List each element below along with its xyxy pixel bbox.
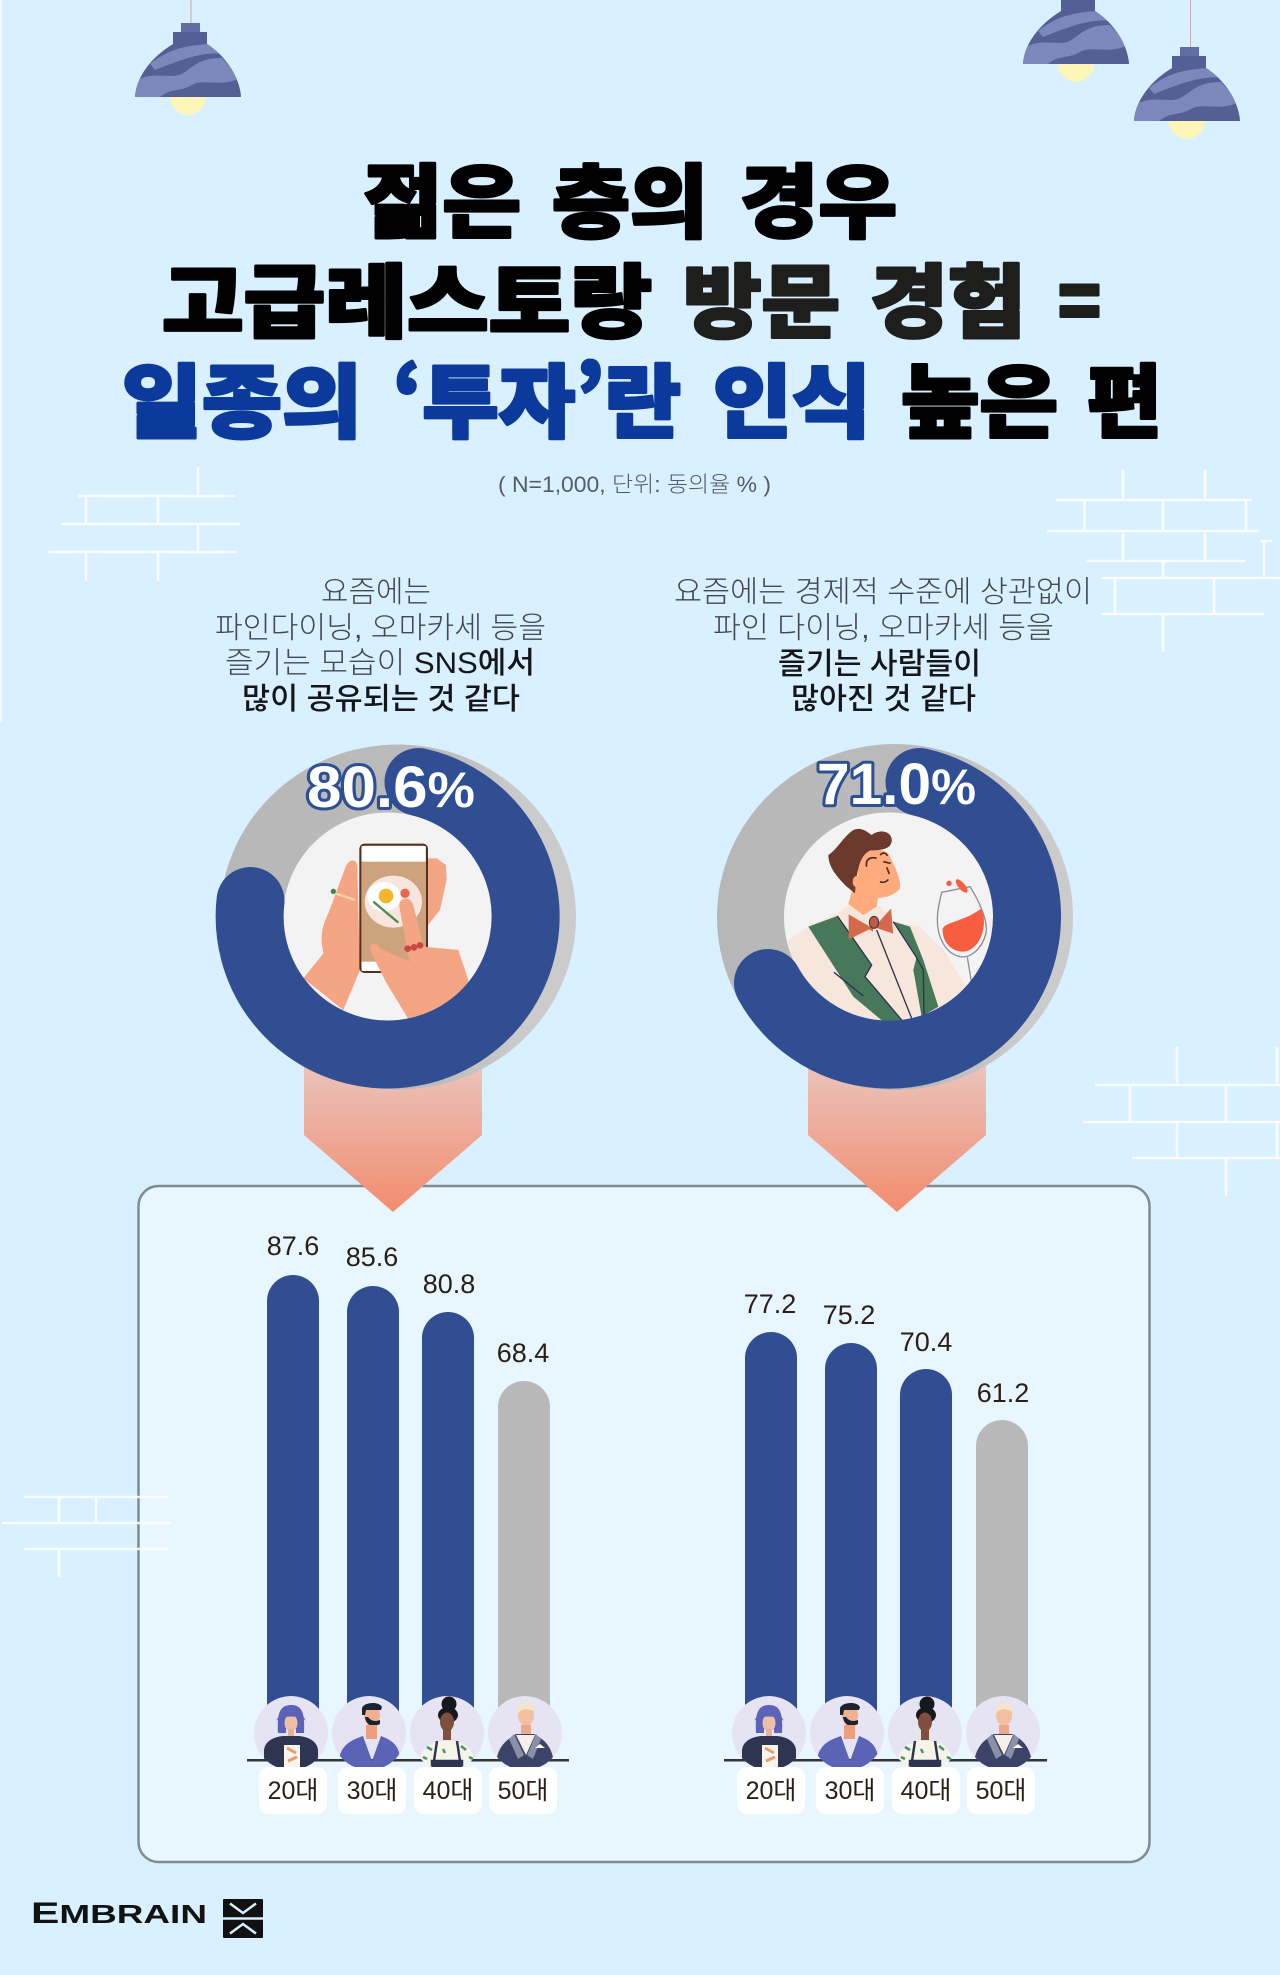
avatar: 40s xyxy=(410,1696,484,1770)
donut chart: 71.0%: 71.0% xyxy=(817,752,976,817)
title: 방문 xyxy=(683,239,840,355)
age labels and avatars: right: 50대 xyxy=(976,1777,1026,1805)
logo: Embrain wordmark: E MBRAIN xyxy=(31,1897,207,1930)
title: = xyxy=(1058,239,1101,355)
avatar: 50s xyxy=(488,1696,562,1770)
text block: left question: 요즘에는 xyxy=(321,576,431,609)
title xyxy=(122,139,1162,455)
bar chart: right age groups: 77.2 xyxy=(744,1289,796,1319)
text block: left question: 많이 공유되는 것 같다 xyxy=(242,683,520,716)
text block: right question: 요즘에는 경제적 수준에 상관없이 xyxy=(674,576,1092,609)
avatar: 20s right xyxy=(732,1696,806,1770)
age labels and avatars: right: 40대 xyxy=(901,1777,951,1805)
lamp: right upper xyxy=(1018,0,1129,82)
bar chart: right age groups xyxy=(744,1289,1029,1740)
bar chart: right age groups: 75.2 xyxy=(823,1300,875,1330)
donut chart: 80.6%: 80.6% xyxy=(307,755,475,820)
text block: right question: 파인 다이닝, 오마카세 등을 xyxy=(713,612,1054,645)
text block: left question: 파인다이닝, 오마카세 등을 xyxy=(215,612,546,645)
title: 젊은 xyxy=(364,139,521,255)
bar chart: left age groups: 68.4 xyxy=(497,1338,549,1368)
title: 경우 xyxy=(740,139,897,255)
age labels and avatars: left: 30대 xyxy=(347,1777,397,1805)
arrow: right xyxy=(808,1040,986,1212)
title: 편 xyxy=(1087,339,1162,455)
title: 고급레스토랑 xyxy=(162,239,652,355)
age labels and avatars: right: 20대 xyxy=(746,1777,796,1805)
brick pattern: left bottom xyxy=(2,1497,170,1577)
brick pattern: right top xyxy=(1047,470,1280,652)
text block: left question xyxy=(215,576,546,716)
arrow: left xyxy=(304,1040,482,1212)
lamp: right lower xyxy=(1129,0,1240,139)
title: 높은 xyxy=(901,339,1058,455)
age labels and avatars: left: 20대 xyxy=(268,1777,318,1805)
avatar: 50s right xyxy=(966,1696,1040,1770)
brick pattern: left top xyxy=(48,467,240,581)
avatar: 40s right xyxy=(888,1696,962,1770)
icon: man with wine glass xyxy=(788,829,986,1023)
age labels and avatars: left: 50대 xyxy=(498,1777,548,1805)
panel: age group charts xyxy=(138,1186,1150,1862)
bar chart: left age groups: 80.8 xyxy=(423,1269,475,1299)
title: 일종의 xyxy=(122,339,362,455)
sample note: ( N=1,000, 단위: 동의율 % ) xyxy=(498,472,771,497)
icon: Embrain mark xyxy=(223,1899,263,1938)
title: 층의 xyxy=(552,139,708,255)
label: 20s xyxy=(259,1767,327,1814)
bar chart: right age groups: 61.2 xyxy=(977,1378,1029,1408)
age labels and avatars: right xyxy=(724,1696,1047,1814)
donut chart: 71.0% xyxy=(717,744,1073,1090)
text block: right question: 많아진 것 같다 xyxy=(791,683,976,716)
title: 인식 xyxy=(713,339,871,455)
bar chart: right age groups: 70.4 xyxy=(900,1327,952,1357)
text block: right question: 즐기는 사람들이 xyxy=(778,648,981,681)
avatar: 30s xyxy=(332,1696,406,1770)
title: ‘투자’란 xyxy=(393,339,681,455)
label: 20s right xyxy=(737,1767,805,1814)
text block: right question xyxy=(674,576,1092,716)
age labels and avatars: left: 40대 xyxy=(423,1777,473,1805)
bar chart: left age groups: 85.6 xyxy=(346,1242,398,1272)
avatar: 20s xyxy=(254,1696,328,1770)
avatar: 30s right xyxy=(810,1696,884,1770)
title: 경험 xyxy=(870,239,1026,355)
bar chart: left age groups xyxy=(267,1231,550,1740)
lamp: left xyxy=(130,0,241,115)
age labels and avatars: right: 30대 xyxy=(825,1777,875,1805)
bar chart: left age groups: 87.6 xyxy=(267,1231,319,1261)
age labels and avatars: left xyxy=(247,1696,569,1814)
donut chart: 80.6% xyxy=(220,744,576,1090)
text block: left question: 즐기는 모습이 SNS에서 xyxy=(225,647,535,680)
brick pattern: right middle xyxy=(1083,1047,1280,1196)
icon: hands holding phone xyxy=(303,845,468,1023)
